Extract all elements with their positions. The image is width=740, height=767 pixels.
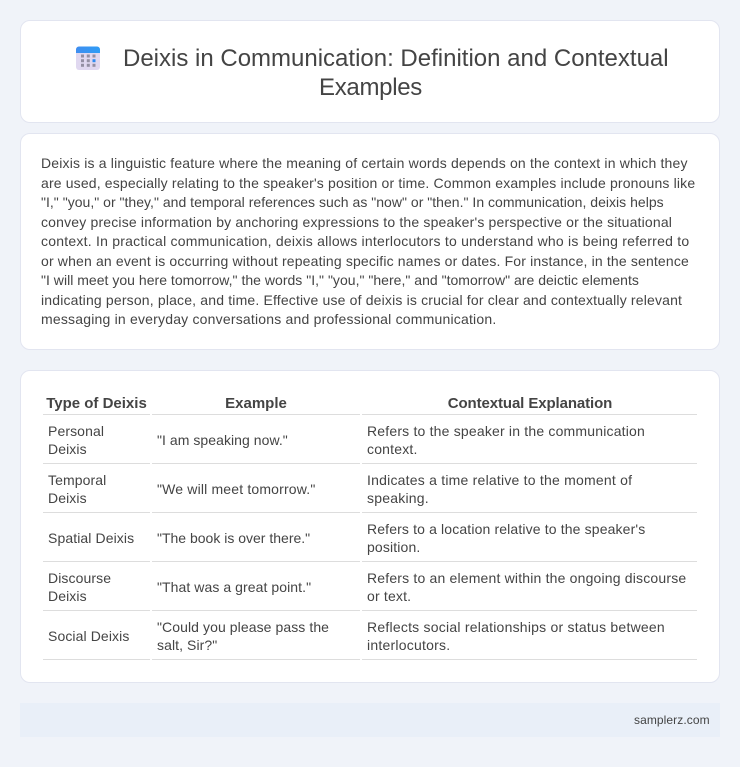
row: social deixis: "Could you please pass the [157, 619, 329, 635]
row: spatial deixis: "The book is over there." [157, 530, 310, 546]
row: social deixis: Social Deixis [48, 628, 129, 644]
icon: calendar [76, 46, 100, 70]
row: spatial deixis: Spatial Deixis [48, 530, 134, 546]
title: Examples [319, 74, 422, 101]
row: personal deixis: context. [367, 441, 418, 457]
intro text: messaging in everyday conversations and professional communication. [41, 311, 496, 327]
row: social deixis [48, 619, 665, 653]
row: temporal deixis: Temporal [48, 472, 106, 488]
row: personal deixis: "I am speaking now." [157, 432, 288, 448]
table header: Type of Deixis [46, 395, 147, 412]
intro text: "I will meet you here tomorrow," the words "I," "you," "here," and "tomorrow" are deictic elements [41, 272, 639, 288]
row: temporal deixis [48, 472, 632, 506]
row: discourse deixis [48, 570, 686, 604]
title [123, 45, 669, 101]
row: discourse deixis: Refers to an element within the ongoing discourse [367, 570, 686, 586]
row: spatial deixis: Refers to a location relative to the speaker's [367, 521, 645, 537]
row: personal deixis: Personal [48, 423, 104, 439]
intro text: indicating person, place, and time. Effective use of deixis is crucial for clear and contextually relevant [41, 292, 682, 308]
row: discourse deixis: "That was a great point." [157, 579, 311, 595]
row: temporal deixis: Deixis [48, 490, 87, 506]
intro text [41, 155, 695, 327]
row: temporal deixis: "We will meet tomorrow." [157, 481, 315, 497]
table [43, 395, 697, 660]
row: personal deixis: Refers to the speaker in the communication [367, 423, 645, 439]
row: social deixis: salt, Sir?" [157, 637, 217, 653]
table header [46, 395, 612, 412]
panel: title card [20, 20, 720, 123]
title: Deixis in Communication: Definition and Contextual [123, 45, 669, 72]
footer bar [20, 703, 720, 737]
intro text: Deixis is a linguistic feature where the meaning of certain words depends on the context in which they [41, 155, 688, 171]
row: personal deixis [48, 423, 645, 457]
panel: intro paragraph [20, 133, 720, 350]
intro text: or when an event is occurring without repeating specific names or dates. For instance, in the sentence [41, 253, 689, 269]
row: temporal deixis: Indicates a time relative to the moment of [367, 472, 632, 488]
intro text: context. In practical communication, deixis allows interlocutors to understand who is being referred to [41, 233, 689, 249]
row: temporal deixis: speaking. [367, 490, 429, 506]
intro text: "I," "you," or "they," and temporal references such as "now" or "then." In communication, deixis helps [41, 194, 664, 210]
row: spatial deixis: position. [367, 539, 420, 555]
intro text: are used, especially relating to the speaker's position or time. Common examples include pronouns like [41, 175, 695, 191]
panel: table card [20, 370, 720, 683]
footer text: samplerz.com [634, 713, 710, 727]
row: discourse deixis: Deixis [48, 588, 87, 604]
row: personal deixis: Deixis [48, 441, 87, 457]
row: discourse deixis: or text. [367, 588, 411, 604]
row: social deixis: Reflects social relationships or status between [367, 619, 665, 635]
row: social deixis: interlocutors. [367, 637, 450, 653]
table header: Example [225, 395, 287, 412]
row: spatial deixis [48, 521, 645, 555]
table header: Contextual Explanation [448, 395, 612, 412]
intro text: convey precise information by anchoring expressions to the speaker's perspective or the situational [41, 214, 672, 230]
row: discourse deixis: Discourse [48, 570, 111, 586]
